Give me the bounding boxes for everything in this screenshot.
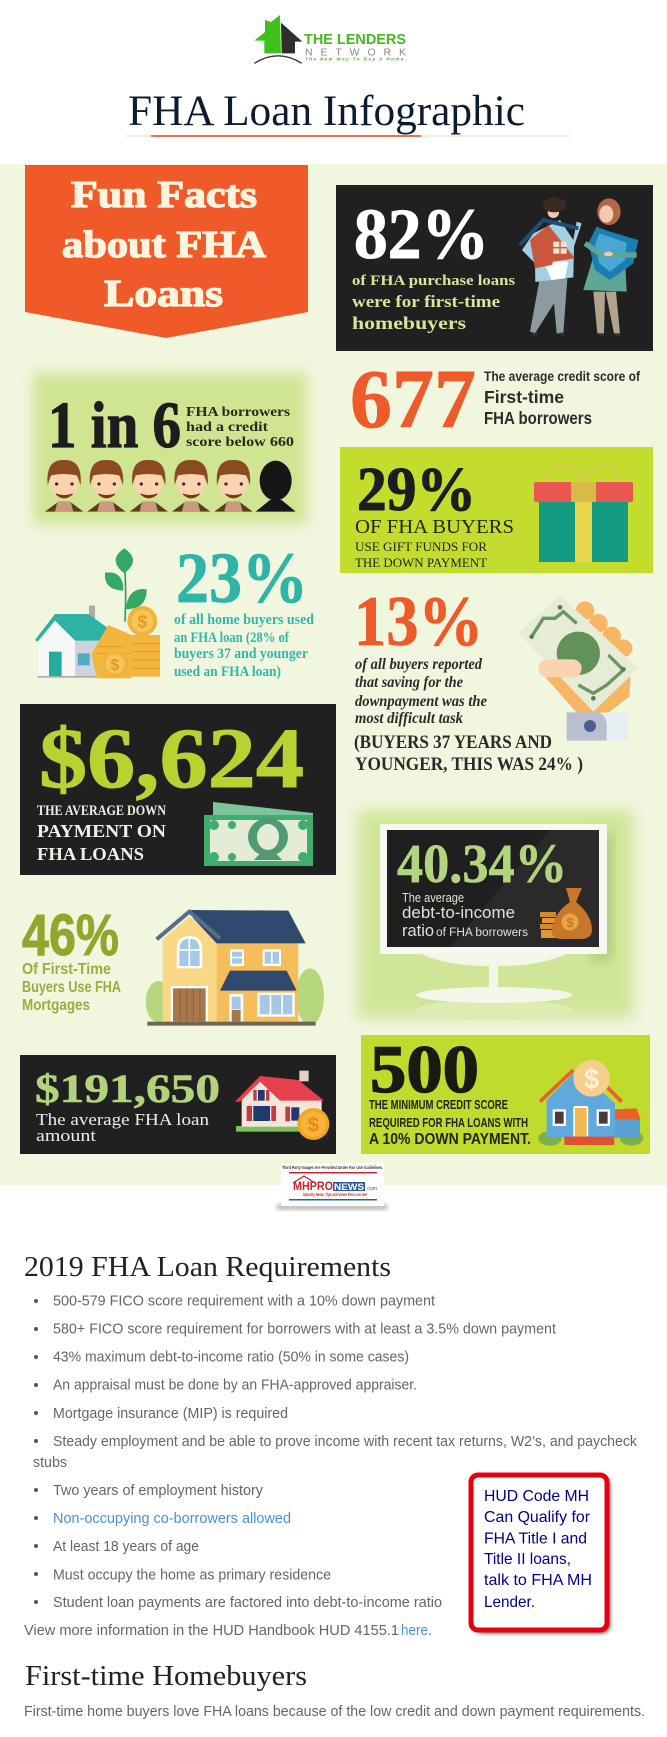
- panel: 40.34% debt-to-income monitor: [358, 810, 633, 1020]
- requirements list: 500-579 FICO score requirement with a 10% down payment: [53, 1294, 435, 1310]
- stat description: FHA borrowers: [484, 408, 592, 428]
- panel: 23% of home buyers: [35, 538, 315, 680]
- stat description: THE AVERAGE DOWN: [37, 803, 166, 819]
- stat description: Of First-Time: [22, 961, 111, 978]
- stamp notice: Third Party Images Are Provided Under Fair Use Guidelines.: [282, 1165, 383, 1170]
- stat description: score below 660: [186, 435, 294, 450]
- stat description: used an FHA loan): [174, 664, 281, 680]
- icon: blue house with coin: [538, 1060, 643, 1146]
- stat description: homebuyers: [352, 313, 466, 333]
- text: first-time paragraph: First-time home buyers love FHA loans because of the low credit and down payment requirements.: [24, 1704, 645, 1720]
- requirements list: At least 18 years of age: [53, 1539, 199, 1555]
- panel: 82% first-time homebuyers: [336, 185, 653, 351]
- title: FHA Loan Infographic: [128, 87, 525, 135]
- banner heading: Fun Facts: [71, 174, 257, 216]
- stat description: most difficult task: [355, 710, 463, 727]
- icon: row of faces: [45, 460, 296, 512]
- requirements list: An appraisal must be done by an FHA-approved appraiser.: [53, 1378, 417, 1394]
- stat $6,624: $6,624: [39, 710, 304, 806]
- panel: $6,624 average down payment: [20, 704, 336, 875]
- callout text: Can Qualify for: [484, 1509, 591, 1526]
- logo: MHProNews stamp: .com: [366, 1186, 377, 1192]
- stat description: First-time: [484, 387, 564, 407]
- stat 1 in 6: 1 in 6: [48, 389, 181, 462]
- stat description: REQUIRED FOR FHA LOANS WITH: [369, 1116, 528, 1130]
- note: buyers 37 and younger: (BUYERS 37 YEARS AND: [354, 733, 552, 753]
- icon: house with coins and plant: $: [111, 657, 120, 674]
- stat description: The average credit score of: [484, 368, 640, 384]
- stat description: The average: [402, 891, 464, 905]
- stat description: THE MINIMUM CREDIT SCORE: [369, 1098, 508, 1112]
- icon: couple with house and shield: [520, 198, 638, 335]
- callout text: talk to FHA MH: [484, 1572, 592, 1589]
- icon: two-storey house: [146, 910, 324, 1026]
- heading: 2019 FHA Loan Requirements: 2019 FHA Loan Requirements: [24, 1251, 391, 1283]
- stamp wordmark: MHPRO: [293, 1181, 333, 1193]
- stat description: of all home buyers used: [174, 612, 315, 628]
- stat description: [369, 1098, 531, 1148]
- stat description: [484, 368, 640, 428]
- callout text: HUD Code MH: [484, 1488, 589, 1505]
- icon: house with coins and plant: $: [138, 611, 148, 631]
- logo: MHProNews stamp: NEWS: [334, 1182, 364, 1193]
- panel: 500 minimum credit score: [361, 1031, 650, 1154]
- requirements list: stubs: [33, 1455, 67, 1471]
- requirements list: 580+ FICO score requirement for borrowers with at least a 3.5% down payment: [53, 1322, 556, 1338]
- heading: First-time Homebuyers: First-time Homebuyers: [25, 1660, 307, 1692]
- text: view more information: .: [428, 1623, 432, 1639]
- stat: 677 credit score: [350, 353, 640, 446]
- icon: banknotes: [204, 802, 313, 866]
- stat description: [186, 405, 294, 450]
- stat 40.34%: 40.34%: [397, 833, 567, 894]
- callout text: FHA Title I and: [484, 1530, 587, 1548]
- stat description: FHA LOANS: [37, 844, 144, 864]
- stat description: [174, 612, 315, 680]
- stat 23%: 23%: [176, 538, 308, 618]
- icon: blue house with coin: $: [584, 1063, 599, 1094]
- logo network line: NETWORK: [305, 46, 406, 58]
- banner heading: about FHA: [62, 224, 267, 266]
- panel: $191,650 average loan amount: [20, 1055, 336, 1154]
- stat description: downpayment was the: [355, 693, 487, 710]
- panel: 1 in 6 borrowers: [33, 373, 307, 524]
- stat description: [355, 516, 514, 570]
- requirements list: Two years of employment history: [53, 1483, 264, 1499]
- icon: house with coins and plant: [35, 548, 160, 678]
- stat description: OF FHA BUYERS: [355, 516, 514, 538]
- stamp tagline: Industry News, Tips and Views Pros can Use: [303, 1192, 367, 1197]
- requirements list: Non-occupying co-borrowers allowed: [53, 1511, 291, 1527]
- logo: The Lenders Network: [254, 15, 406, 63]
- stat description: debt-to-income: [402, 903, 515, 922]
- stat description: of FHA purchase loans: [352, 273, 515, 289]
- stat 13%: 13%: [354, 583, 483, 661]
- stat description: A 10% DOWN PAYMENT.: [369, 1131, 531, 1148]
- note: buyers 37 and younger: [354, 733, 583, 775]
- callout: HUD Code MH: [471, 1475, 610, 1633]
- stat description: FHA borrowers: [186, 405, 291, 420]
- callout text: Title II loans,: [484, 1551, 571, 1568]
- panel: fun facts banner: [25, 165, 308, 338]
- infographic background: [0, 164, 667, 1185]
- logo tagline: The New Way To Buy A Home.: [305, 56, 406, 62]
- stat description: had a credit: [186, 420, 268, 435]
- stat description: [402, 891, 528, 940]
- stat 46%: 46%: [22, 903, 119, 968]
- requirements list: Steady employment and be able to prove income with recent tax returns, W2’s, and paycheck: [53, 1434, 638, 1450]
- requirements list: 43% maximum debt-to-income ratio (50% in some cases): [53, 1350, 409, 1366]
- stat description: THE DOWN PAYMENT: [355, 555, 487, 570]
- icon: gift box: [534, 466, 633, 562]
- banner heading: Loans: [104, 273, 223, 315]
- logo: MHProNews stamp: [277, 1163, 387, 1210]
- stat description: ratio: [402, 921, 434, 940]
- callout text: Lender.: [484, 1594, 535, 1611]
- monitor screen: [380, 824, 607, 954]
- text: view more information: here: [401, 1623, 428, 1639]
- stat $191,650: $191,650: [35, 1066, 220, 1111]
- stat description: [36, 1110, 210, 1145]
- stat 500: 500: [370, 1031, 479, 1107]
- requirements list: [33, 1294, 638, 1611]
- requirements list: Student loan payments are factored into debt-to-income ratio: [53, 1595, 442, 1611]
- stat description: that saving for the: [355, 674, 463, 691]
- panel: 13% saving for down payment: [354, 583, 638, 775]
- logo name: THE LENDERS: [304, 32, 406, 48]
- stat description: of all buyers reported: [355, 656, 483, 673]
- stat description: [352, 273, 515, 333]
- panel: 46% first-time buyers: [22, 903, 324, 1026]
- stat 82%: 82%: [354, 194, 489, 274]
- stat description: buyers 37 and younger: [174, 646, 308, 662]
- requirements list: Must occupy the home as primary residence: [53, 1568, 331, 1584]
- banner heading: [62, 174, 267, 315]
- text: view more information: View more information in the HUD Handbook HUD 4155.1: [24, 1623, 399, 1639]
- stat 29%: 29%: [357, 456, 476, 524]
- stat description: an FHA loan (28% of: [174, 630, 290, 646]
- icon: red house with coin: $: [308, 1114, 320, 1137]
- panel: 29% gift funds: [340, 447, 653, 573]
- icon: hand holding cash: [518, 595, 638, 741]
- icon: money bag: $: [566, 915, 574, 930]
- note: buyers 37 and younger: YOUNGER, THIS WAS 24% ): [355, 755, 583, 775]
- stat description: [37, 803, 166, 864]
- stat description: The average FHA loan: [36, 1110, 210, 1129]
- stat description: Buyers Use FHA: [22, 979, 121, 996]
- stat description: [22, 961, 121, 1014]
- icon: money bag: [540, 888, 592, 939]
- stat description: were for first-time: [352, 292, 501, 311]
- icon: house: [254, 15, 302, 63]
- callout text: [484, 1488, 592, 1611]
- stat description: Mortgages: [22, 997, 90, 1014]
- icon: red house with coin: [235, 1071, 329, 1140]
- stat description: PAYMENT ON: [37, 821, 166, 841]
- stat description: of FHA borrowers: [436, 927, 528, 939]
- stat description: amount: [36, 1126, 96, 1145]
- stat: 677 credit score: 677: [350, 353, 476, 446]
- requirements list: Mortgage insurance (MIP) is required: [53, 1406, 288, 1422]
- stat description: USE GIFT FUNDS FOR: [355, 539, 487, 554]
- monitor stand: [416, 954, 572, 1020]
- stat description: [355, 656, 487, 727]
